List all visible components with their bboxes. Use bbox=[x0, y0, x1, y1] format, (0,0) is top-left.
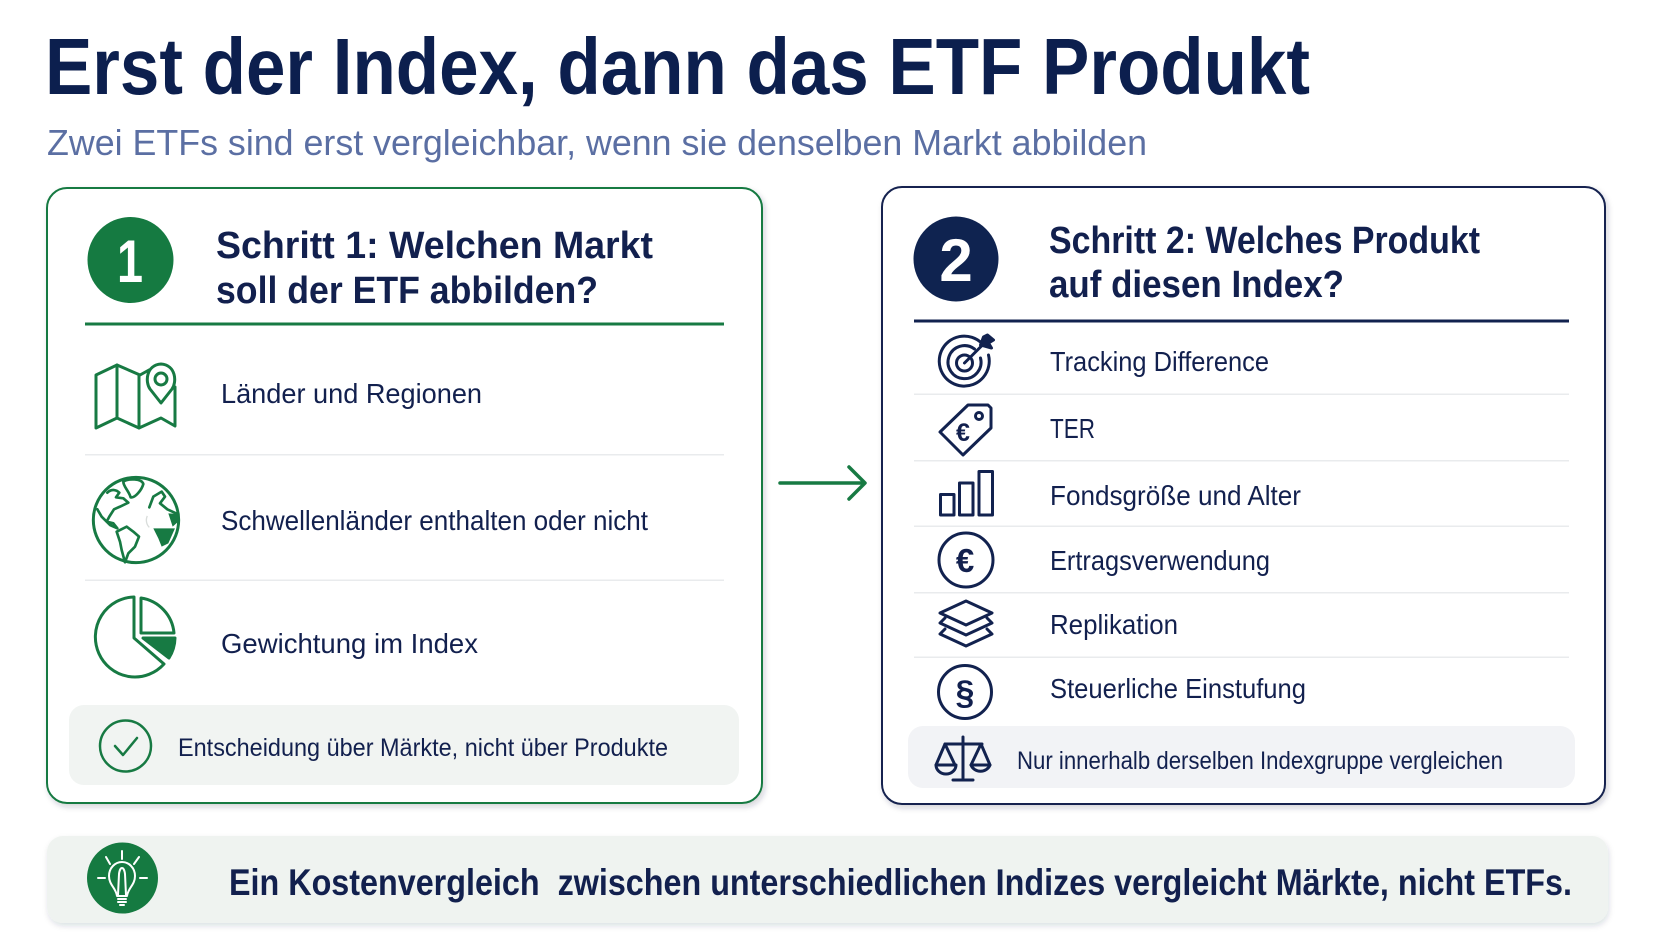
heading: Schritt 2: Schritt 2: Welches Produkt bbox=[1049, 220, 1480, 262]
icon: price tag bbox=[940, 405, 991, 455]
icon: euro coin bbox=[939, 533, 993, 587]
row: TER: TER bbox=[1050, 413, 1095, 444]
heading: Schritt 1: Schritt 1: Welchen Markt bbox=[216, 225, 653, 267]
callout: Entscheidung: Entscheidung über Märkte, nicht über Produkte bbox=[178, 734, 668, 762]
heading: Schritt 1: soll der ETF abbilden? bbox=[216, 270, 598, 312]
callout: Entscheidung bbox=[69, 705, 739, 785]
icon: light bulb bbox=[87, 842, 158, 914]
panel frame bbox=[47, 188, 762, 803]
icon: globe bbox=[93, 477, 179, 563]
banner: key takeaway bbox=[47, 836, 1608, 923]
row: Schwellenländer bbox=[93, 477, 648, 563]
row: Replikation bbox=[940, 601, 1178, 646]
title: Erst der Index, dann das ETF Produkt bbox=[45, 22, 1310, 111]
row: Fondsgröße und Alter bbox=[940, 472, 1301, 515]
row: Steuerliche Einstufung: Steuerliche Einstufung bbox=[1050, 673, 1306, 704]
row: Länder und Regionen bbox=[96, 364, 482, 428]
heading: Schritt 2: auf diesen Index? bbox=[1049, 264, 1344, 306]
subtitle: Zwei ETFs sind erst vergleichbar, wenn sie denselben Markt abbilden bbox=[47, 122, 1147, 163]
row: Gewichtung im Index: Gewichtung im Index bbox=[221, 628, 478, 659]
step badge 2 bbox=[914, 216, 998, 302]
step badge 1 bbox=[88, 217, 174, 303]
panel: Schritt 1 bbox=[47, 188, 762, 803]
row: Ertragsverwendung: Ertragsverwendung bbox=[1050, 545, 1270, 576]
row: Gewichtung im Index bbox=[95, 597, 478, 677]
row: TER bbox=[940, 405, 1095, 455]
heading: Schritt 2 bbox=[1049, 220, 1480, 306]
icon: price tag: € bbox=[956, 419, 970, 447]
icon: euro coin: € bbox=[956, 542, 974, 579]
icon: pie chart bbox=[95, 597, 175, 677]
row: Ertragsverwendung bbox=[939, 533, 1270, 587]
icon: bars bbox=[940, 472, 992, 515]
icon: paragraph bbox=[938, 666, 992, 718]
row: Länder und Regionen: Länder und Regionen bbox=[221, 378, 482, 409]
row: Steuerliche Einstufung bbox=[938, 666, 1306, 718]
icon: paragraph: § bbox=[956, 674, 974, 712]
panel frame bbox=[882, 187, 1605, 804]
icon: check bbox=[100, 720, 151, 772]
panel: Schritt 2 bbox=[882, 187, 1605, 804]
step badge 1: 1 bbox=[117, 228, 143, 295]
icon: layers bbox=[940, 601, 992, 646]
row: Replikation: Replikation bbox=[1050, 609, 1178, 640]
callout: Indexgruppe bbox=[908, 726, 1575, 788]
arrow bbox=[780, 467, 865, 499]
row: Tracking Difference: Tracking Difference bbox=[1050, 346, 1269, 377]
callout: Indexgruppe: Nur innerhalb derselben Indexgruppe vergleichen bbox=[1017, 747, 1503, 775]
row: Schwellenländer: Schwellenländer enthalten oder nicht bbox=[221, 505, 648, 536]
heading: Schritt 1 bbox=[216, 225, 653, 312]
row: Tracking Difference bbox=[939, 335, 1269, 386]
step badge 2: 2 bbox=[939, 227, 973, 294]
icon: map with pin bbox=[96, 364, 175, 428]
icon: target bbox=[939, 335, 994, 386]
row: Fondsgröße und Alter: Fondsgröße und Alter bbox=[1050, 480, 1301, 511]
icon: scales bbox=[936, 737, 990, 780]
